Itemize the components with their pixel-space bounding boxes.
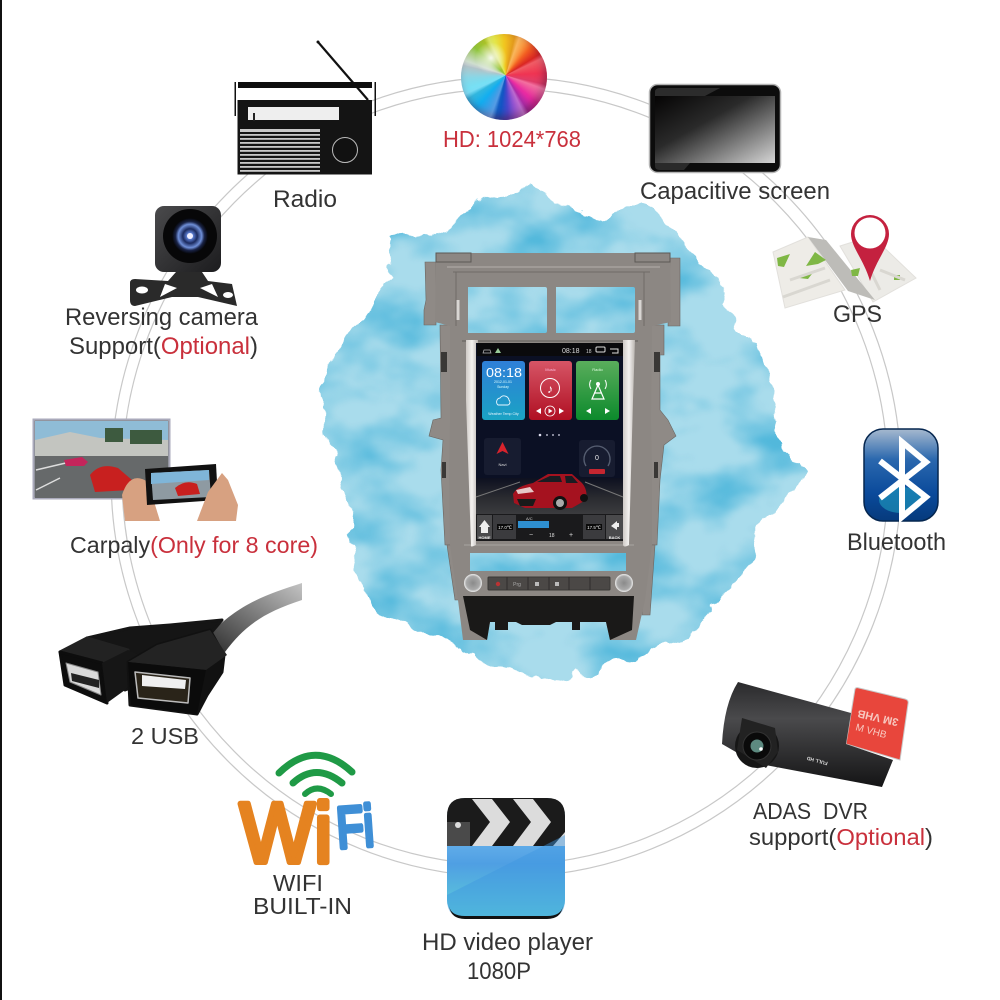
icon: dash cam: FULL HD bbox=[806, 754, 829, 766]
tile: clock bbox=[482, 361, 525, 420]
tile: clock: 2012-01-01 bbox=[494, 380, 512, 384]
climate bar bbox=[476, 514, 623, 541]
status bar bbox=[477, 343, 623, 356]
icon: WiFi logo: Wi bbox=[240, 786, 332, 880]
screen bbox=[476, 343, 623, 541]
tile: radio bbox=[576, 361, 619, 420]
icon: video clapper bbox=[447, 798, 565, 919]
icon: Carplay screen and phone bbox=[34, 420, 238, 521]
climate bar: BACK bbox=[609, 535, 620, 540]
control strip: Prg bbox=[513, 582, 521, 588]
head unit bbox=[424, 253, 680, 640]
label: WIFI: WIFI bbox=[273, 870, 323, 896]
radio icon bbox=[234, 40, 376, 174]
label: Bluetooth: Bluetooth bbox=[847, 529, 946, 556]
status bar: 18 bbox=[586, 349, 592, 355]
silver bezel strips bbox=[466, 340, 478, 546]
ring of double arcs bbox=[111, 77, 901, 877]
climate bar: HOME bbox=[478, 535, 491, 540]
page dots bbox=[539, 434, 560, 436]
icon: dash cam bbox=[722, 682, 908, 787]
label: 2 USB: 2 USB bbox=[131, 723, 199, 749]
trim frame with window cut-outs bbox=[435, 253, 671, 640]
label: 1080P: 1080P bbox=[467, 958, 531, 985]
climate bar: − bbox=[529, 532, 533, 539]
icon: WiFi logo bbox=[240, 755, 376, 880]
label: support optional: support(Optional) bbox=[749, 824, 933, 850]
tile: clock: Sunday bbox=[497, 385, 509, 389]
label: Capacitive screen: Capacitive screen bbox=[640, 178, 830, 205]
tile: clock: 08:18 bbox=[486, 365, 522, 380]
label: Support optional: Support(Optional) bbox=[69, 333, 258, 360]
mounting tabs bbox=[424, 258, 680, 615]
icon: WiFi logo: Fi bbox=[334, 794, 376, 861]
icon: reversing camera bbox=[130, 206, 237, 306]
climate bar: A/C bbox=[526, 516, 533, 521]
climate bar: 18 bbox=[549, 533, 555, 539]
climate bar: 17.5℃ bbox=[587, 525, 602, 530]
icon: colour ball bbox=[461, 34, 547, 120]
tile: radio: Radio bbox=[592, 367, 604, 372]
icon: dash cam: 3M VHB bbox=[856, 707, 900, 728]
icon: USB cable bbox=[60, 583, 302, 714]
label: BUILT-IN: BUILT-IN bbox=[253, 893, 352, 919]
blue watercolor splash bbox=[320, 184, 800, 680]
trim highlights bbox=[436, 253, 670, 545]
label: Radio: Radio bbox=[273, 186, 337, 213]
nav tile: Navi bbox=[498, 462, 507, 467]
nav tile bbox=[484, 438, 521, 475]
tile: clock: Weather Temp City bbox=[488, 412, 519, 416]
icon: GPS map and pin bbox=[773, 215, 916, 308]
tile: music bbox=[529, 361, 572, 420]
tile: music: ♪ bbox=[547, 382, 553, 396]
icon: dash cam: M VHB bbox=[854, 722, 888, 741]
left edge line bbox=[0, 0, 2, 1000]
status bar: 08:18 bbox=[562, 348, 580, 355]
label: HD video player: HD video player bbox=[422, 929, 593, 956]
tile: music: Music bbox=[545, 367, 556, 372]
climate bar: + bbox=[569, 532, 573, 539]
control strip bbox=[464, 574, 633, 592]
label: GPS: GPS bbox=[833, 301, 882, 328]
label: ADAS DVR: ADAS DVR bbox=[753, 798, 868, 824]
label: HD 1024*768: HD: 1024*768 bbox=[443, 126, 581, 152]
icon: capacitive screen bbox=[650, 84, 780, 172]
speed tile: 0 bbox=[595, 455, 599, 462]
speed tile bbox=[579, 440, 615, 477]
label: Carpaly: Carpaly(Only for 8 core) bbox=[70, 532, 318, 558]
climate bar: 17.0℃ bbox=[498, 525, 513, 530]
label: Reversing camera: Reversing camera bbox=[65, 304, 259, 331]
lower pocket bbox=[463, 596, 634, 640]
icon: Bluetooth bbox=[864, 429, 938, 521]
road and car bbox=[476, 474, 623, 514]
